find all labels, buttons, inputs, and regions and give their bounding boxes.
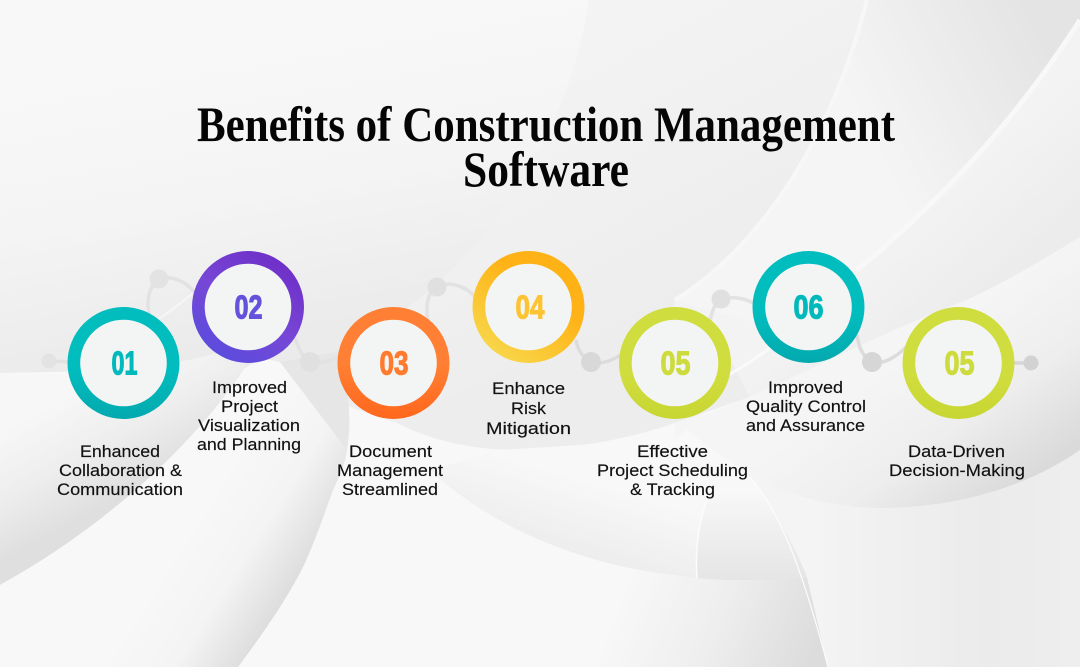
- connector line: [42, 270, 1038, 372]
- title: Software: [463, 141, 629, 197]
- step 03: Document: [349, 443, 432, 461]
- step 02: Improved: [212, 379, 287, 397]
- step 05 (data-driven): 05: [944, 344, 974, 382]
- step 03: Streamlined: [342, 481, 438, 499]
- step 01: [57, 307, 183, 499]
- step 01: Collaboration &: [59, 462, 182, 480]
- step 05: & Tracking: [630, 481, 715, 499]
- step 02: [192, 251, 304, 454]
- step 05 (data-driven): Decision-Making: [889, 462, 1025, 480]
- step 06: Quality Control: [746, 398, 866, 416]
- step 05: [597, 307, 748, 499]
- step 05: Project Scheduling: [597, 462, 748, 480]
- step 04: Mitigation: [486, 420, 571, 438]
- step 02: Project: [221, 398, 278, 416]
- step 01: Communication: [57, 481, 183, 499]
- step 02: 02: [234, 288, 262, 326]
- step 06: and Assurance: [746, 417, 865, 435]
- step 04: Enhance: [492, 380, 565, 398]
- step 02: Visualization: [198, 417, 300, 435]
- title: Benefits of Construction Management: [197, 96, 895, 152]
- step 05 (data-driven): [889, 307, 1025, 480]
- step 06: 06: [794, 288, 824, 326]
- step 06: [746, 251, 866, 435]
- step 01: Enhanced: [80, 443, 160, 461]
- step 04: Risk: [511, 400, 547, 418]
- white stripes: [675, 0, 867, 300]
- title: [197, 96, 895, 197]
- step 05 (data-driven): Data-Driven: [908, 443, 1005, 461]
- step 03: Management: [337, 462, 443, 480]
- step 03: [337, 307, 450, 499]
- step 05: 05: [660, 344, 690, 382]
- step 02: and Planning: [197, 436, 301, 454]
- step 01: 01: [112, 344, 138, 382]
- step 06: Improved: [768, 379, 843, 397]
- step 04: 04: [516, 288, 545, 326]
- step 05: Effective: [637, 443, 708, 461]
- step 04: [472, 251, 584, 438]
- step 03: 03: [380, 344, 408, 382]
